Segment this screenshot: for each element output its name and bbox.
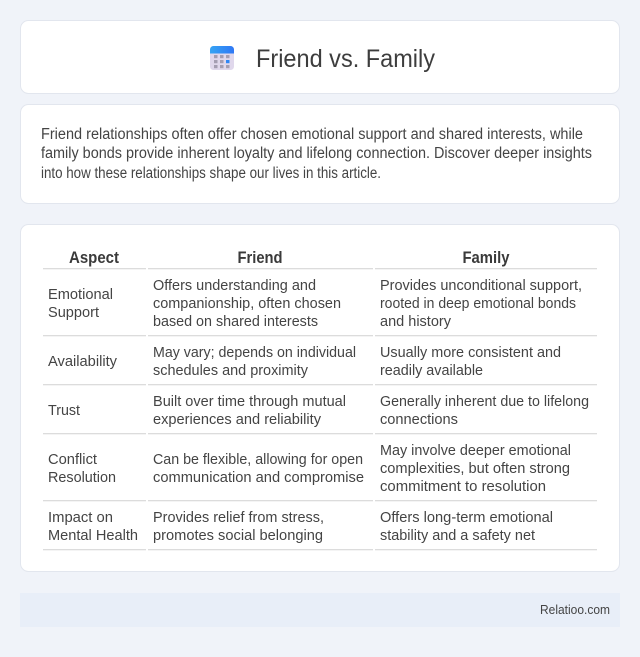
row: trust: Built over time through mutual [153,394,346,410]
row: impact on mental health: Mental Health [48,528,138,544]
intro paragraph: family bonds provide inherent loyalty and lifelong connection. Discover deeper insights [41,145,592,162]
intro paragraph: Friend relationships often offer chosen emotional support and shared interests, while [41,126,583,143]
row: trust: Generally inherent due to lifelong [380,394,589,410]
panel: title card [20,20,620,94]
row: emotional support: Emotional [48,287,113,303]
table header [69,249,510,267]
row: impact on mental health: promotes social belonging [153,528,323,544]
row: emotional support: Offers understanding and [153,278,316,294]
row: availability: Usually more consistent and [380,345,561,361]
row: impact on mental health: Impact on [48,510,113,526]
panel: comparison table card [20,224,620,572]
footer credit: Relatioo.com [540,602,610,617]
row: impact on mental health [48,510,553,544]
row: conflict resolution: Can be flexible, allowing for open [153,452,363,468]
intro paragraph: into how these relationships shape our lives in this article. [41,165,381,182]
row: emotional support [48,278,582,330]
row: impact on mental health: Provides relief from stress, [153,510,324,526]
icon: calendar [210,46,234,70]
row: trust [48,394,589,428]
row: conflict resolution: complexities, but often strong [380,461,570,477]
row: conflict resolution: commitment to resolution [380,479,546,495]
row: conflict resolution: communication and compromise [153,470,364,486]
row: emotional support: Support [48,305,99,321]
table header: Aspect [69,249,119,267]
row: trust: Trust [48,403,80,419]
row: availability: readily available [380,363,483,379]
row: conflict resolution: Conflict [48,452,97,468]
row: trust: connections [380,412,458,428]
row: availability [48,345,561,379]
row: emotional support: and history [380,314,452,330]
row: emotional support: companionship, often chosen [153,296,341,312]
row: impact on mental health: stability and a safety net [380,528,535,544]
row: impact on mental health: Offers long-term emotional [380,510,553,526]
row: trust: experiences and reliability [153,412,322,428]
intro paragraph [41,126,592,182]
row: availability: May vary; depends on individual [153,345,356,361]
title: Friend vs. Family [256,45,435,73]
row: availability: Availability [48,354,118,370]
row: conflict resolution: May involve deeper emotional [380,443,571,459]
row: conflict resolution [48,443,571,495]
row: emotional support: based on shared interests [153,314,318,330]
row: availability: schedules and proximity [153,363,309,379]
row: emotional support: Provides unconditional support, [380,278,582,294]
table rules [43,268,597,550]
footer bar [20,593,620,627]
row: conflict resolution: Resolution [48,470,116,486]
table header: Friend [238,249,282,267]
panel: intro text card [20,104,620,204]
table header: Family [462,249,510,267]
row: emotional support: rooted in deep emotional bonds [380,296,576,312]
